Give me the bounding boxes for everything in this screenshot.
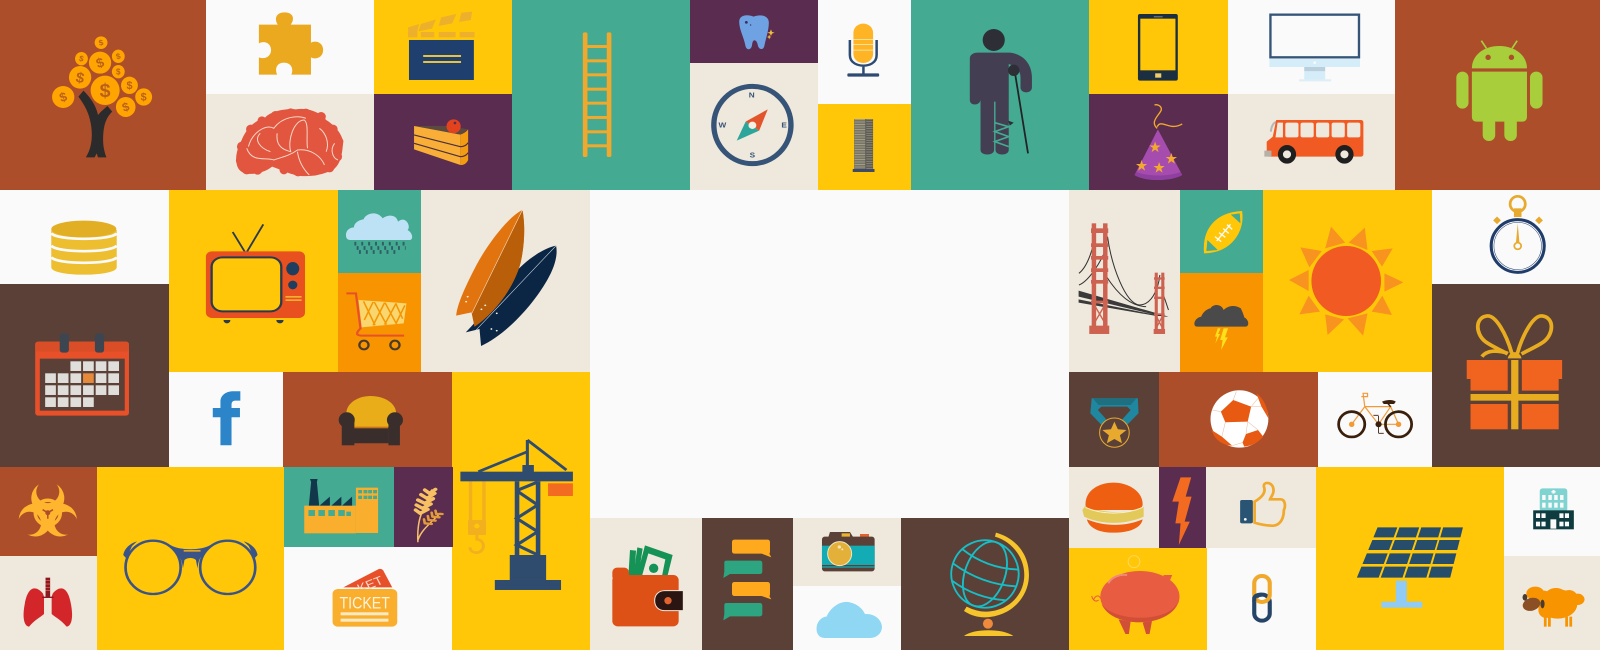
icon: bus: [1264, 120, 1363, 164]
icon: compass: N: [749, 91, 755, 99]
bottom-centre icons: [612, 531, 1029, 638]
icon: blue cloud: [817, 602, 882, 638]
icon: money tree: $: [100, 80, 111, 102]
icon: surfboards: [456, 210, 557, 346]
icon: compass: S: [750, 151, 755, 160]
icon: tower crane: [460, 440, 573, 590]
icon: money tree: $: [94, 54, 107, 71]
icon: tooth: [739, 15, 775, 49]
icon: desk globe: [942, 531, 1029, 636]
icon: wallet with cash: [612, 545, 683, 626]
icon: tickets: [333, 569, 397, 627]
middle-right icons: [1079, 196, 1562, 448]
icon: burger: [1082, 483, 1144, 533]
icon: wheat: [416, 489, 442, 542]
icon: money tree: $: [78, 54, 85, 64]
icon: facebook logo: [213, 391, 240, 445]
icon: tickets: TICKET: [339, 593, 390, 612]
icon: compass: [714, 86, 791, 164]
icon: money tree: $: [57, 89, 69, 105]
icon: medal: [1090, 398, 1139, 447]
icon: american football: [1204, 212, 1242, 253]
icon: party hat: [1135, 105, 1182, 180]
icon: person with crutch and leg cast: [970, 29, 1032, 154]
icon: money tree: $: [98, 38, 105, 48]
icon: piggy bank: [1092, 556, 1180, 634]
icon: sun: [1289, 227, 1403, 336]
icon: soccer ball: [1211, 390, 1268, 448]
top-right icons: [1135, 14, 1543, 180]
icon: lightning bolt: [1172, 477, 1192, 545]
icon: retro television: [206, 224, 305, 323]
icon: compass: W: [719, 121, 727, 130]
icon: shopping cart: [346, 293, 406, 349]
icon: money tree: $: [141, 92, 147, 104]
icon: stopwatch: [1491, 196, 1544, 272]
icon: money tree: [52, 36, 152, 157]
icon: compass: E: [781, 121, 787, 130]
icon: armchair: [339, 396, 403, 445]
icon: cake slice: [414, 119, 468, 165]
icon: money tree: $: [120, 99, 131, 115]
icon: round glasses: [123, 541, 258, 594]
icon: sheep: [1521, 587, 1585, 627]
icon: thumbs up: [1240, 483, 1285, 526]
icon: lungs: [24, 578, 72, 627]
icon: camera: [822, 532, 875, 571]
icon: brain: [236, 108, 343, 176]
bottom-left icons: [24, 440, 573, 627]
bottom-right icons: [1082, 477, 1585, 634]
icon: factory: [304, 479, 378, 533]
icon: bicycle: [1339, 393, 1412, 437]
icon: tickets: KET: [355, 573, 386, 595]
icon: money tree: $: [115, 52, 122, 61]
icon: chain link: [1254, 576, 1270, 621]
icon: clapperboard: [408, 12, 475, 80]
icon: chat bubbles: [723, 540, 771, 620]
icon: hospital: [1533, 488, 1574, 529]
icon: gift box: [1467, 316, 1562, 429]
icon: solar panel: [1357, 527, 1463, 608]
icon: party hat: ★: [1135, 159, 1148, 175]
icon: calendar: [35, 333, 129, 416]
icon: money tree: $: [116, 67, 121, 76]
icon: microphone: [847, 24, 879, 77]
icon: party hat: ★: [1165, 152, 1178, 168]
icon: ladder: [583, 32, 611, 157]
icon: money tree: $: [126, 80, 132, 92]
icon: party hat: ★: [1153, 161, 1166, 177]
icon: rain cloud: [346, 213, 412, 252]
icon: coin stack: [51, 221, 117, 275]
icon: biohazard symbol: [15, 484, 81, 541]
top-left icons: [52, 12, 475, 176]
top-centre icons: [583, 15, 1032, 172]
icon: skyscraper: [853, 119, 874, 172]
icon: suspension bridge: [1079, 223, 1168, 334]
icon: party hat: ★: [1149, 140, 1162, 156]
icon: thunderstorm cloud: [1194, 305, 1248, 350]
icon: puzzle piece: [259, 12, 323, 75]
icon: android robot: [1456, 41, 1543, 141]
icon: desktop monitor: [1269, 15, 1360, 81]
icon: money tree: $: [74, 70, 85, 87]
icon: smartphone: [1138, 14, 1178, 81]
middle-left icons: [35, 210, 557, 445]
